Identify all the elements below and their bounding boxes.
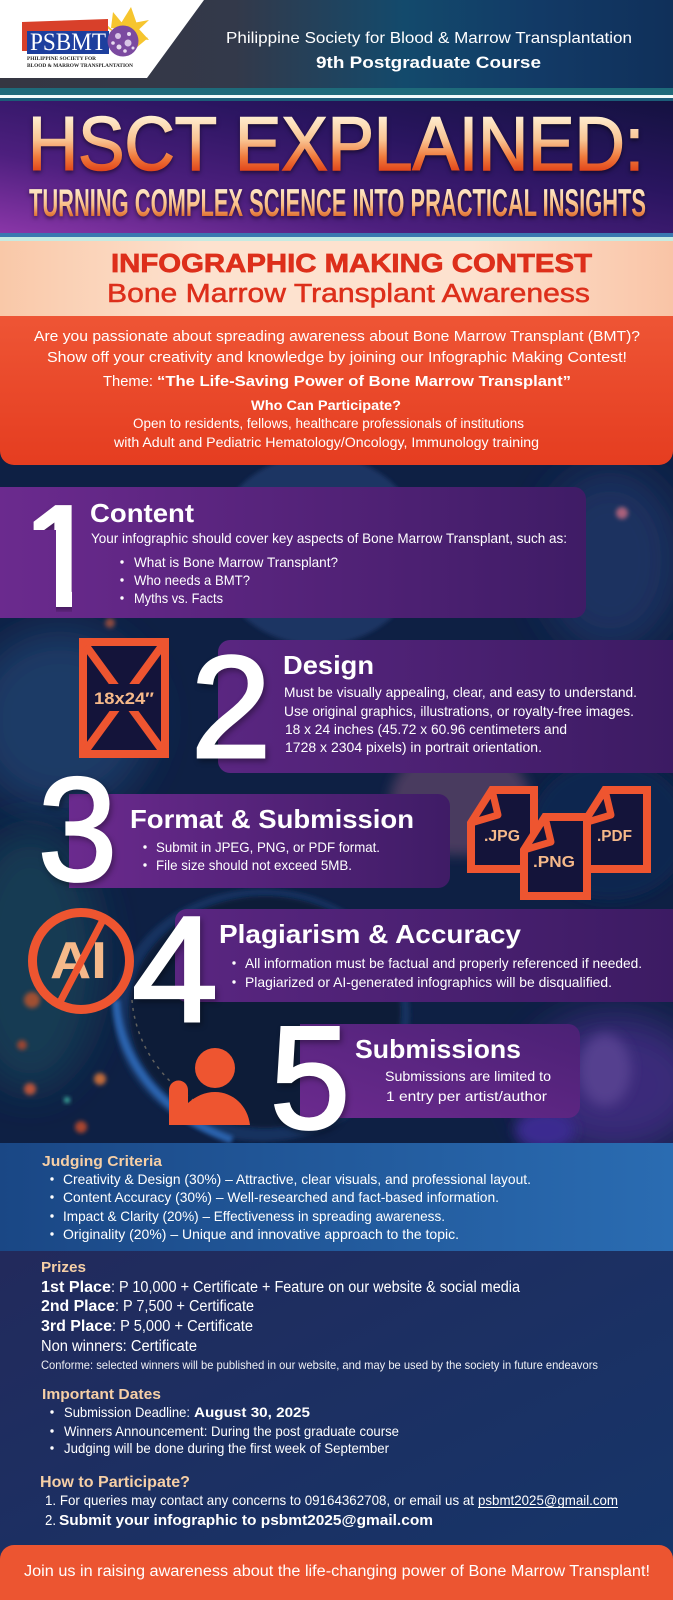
icon: sun rays bbox=[104, 7, 149, 48]
icon: JPG file bbox=[471, 790, 534, 869]
bullet list: Plagiarized or AI-generated infographics will be disqualified. bbox=[245, 974, 612, 990]
body text: 1 entry per artist/author bbox=[386, 1088, 547, 1104]
intro panel: Are you passionate about spreading awareness about Bone Marrow Transplant (BMT)? bbox=[34, 328, 640, 345]
third place: 3rd Place bbox=[41, 1318, 112, 1335]
bullet list: Myths vs. Facts bbox=[134, 590, 223, 606]
third place: : P 5,000 + Certificate bbox=[112, 1318, 253, 1335]
header text: society and course bbox=[226, 30, 632, 72]
logo subtitle: PHILIPPINE SOCIETY FOR bbox=[27, 56, 96, 62]
first place: : P 10,000 + Certificate + Feature on our website & social media bbox=[111, 1279, 520, 1296]
heading: Plagiarism & Accuracy bbox=[219, 919, 522, 949]
who can participate: with Adult and Pediatric Hematology/Oncology, Immunology training bbox=[113, 435, 539, 450]
bullet list bbox=[143, 839, 380, 873]
number 2: 2 bbox=[191, 626, 271, 788]
heading: Design bbox=[283, 650, 374, 680]
number 5: 5 bbox=[270, 996, 350, 1159]
panel 3: format and submission bbox=[38, 748, 450, 912]
bullet list: Who needs a BMT? bbox=[134, 572, 250, 588]
how to participate section: psbmt2025@gmail.com bbox=[478, 1492, 618, 1508]
contest heading panel bbox=[0, 237, 673, 316]
top header band bbox=[0, 0, 673, 101]
body text bbox=[385, 1068, 551, 1104]
panel 5: submissions bbox=[270, 996, 580, 1159]
logo name: PSBMT bbox=[30, 29, 106, 56]
panel 1: content: Your infographic should cover key aspects of Bone Marrow Transplant, such as: bbox=[91, 530, 567, 546]
icon: no AI: AI bbox=[50, 932, 107, 990]
bullet list: Submit in JPEG, PNG, or PDF format. bbox=[156, 839, 380, 855]
intro panel bbox=[0, 316, 673, 465]
theme: “The Life-Saving Power of Bone Marrow Transplant” bbox=[157, 373, 571, 390]
logo subtitle: BLOOD & MARROW TRANSPLANTATION bbox=[27, 63, 133, 69]
first place: 1st Place bbox=[41, 1279, 111, 1296]
number 1: 1 bbox=[25, 474, 95, 639]
how to participate section bbox=[40, 1474, 618, 1529]
bullet list bbox=[120, 554, 338, 606]
second place: 2nd Place bbox=[41, 1298, 115, 1315]
bullet list bbox=[232, 955, 642, 990]
criteria list: Originality (20%) – Unique and innovative approach to the topic. bbox=[63, 1226, 459, 1242]
third place bbox=[41, 1318, 253, 1335]
second place: : P 7,500 + Certificate bbox=[115, 1298, 254, 1315]
conforme note: Conforme: selected winners will be published in our website, and may be used by the society in future endeavors bbox=[41, 1358, 598, 1372]
logo subtitle bbox=[27, 56, 133, 69]
criteria list bbox=[50, 1171, 531, 1242]
non winners: Non winners: Certificate bbox=[41, 1338, 197, 1355]
bullet list: What is Bone Marrow Transplant? bbox=[134, 554, 338, 570]
prizes section bbox=[41, 1259, 598, 1372]
heading: Submissions bbox=[355, 1034, 521, 1064]
icon: purple marrow cell bbox=[108, 26, 138, 56]
body text: 18 x 24 inches (45.72 x 60.96 centimeters and bbox=[285, 721, 567, 737]
panel 1: content bbox=[0, 487, 586, 618]
logo panel bbox=[0, 0, 204, 78]
panel: lower information background bbox=[0, 1251, 673, 1600]
intro panel: Show off your creativity and knowledge by joining our Infographic Making Contest! bbox=[47, 349, 627, 366]
closing call-to-action banner: Join us in raising awareness about the life-changing power of Bone Marrow Transplant! bbox=[24, 1563, 650, 1580]
important dates section bbox=[42, 1386, 399, 1456]
criteria list: Content Accuracy (30%) – Well-researched and fact-based information. bbox=[63, 1189, 499, 1205]
who can participate: Who Can Participate? bbox=[251, 398, 401, 413]
body text: Use original graphics, illustrations, or royalty-free images. bbox=[284, 703, 634, 719]
panel: judging criteria bbox=[0, 1143, 673, 1251]
who can participate: Open to residents, fellows, healthcare professionals of institutions bbox=[133, 416, 524, 431]
body text: Submissions are limited to bbox=[385, 1068, 551, 1084]
important dates section: August 30, 2025 bbox=[194, 1404, 310, 1420]
heading: Content bbox=[90, 498, 194, 528]
bullet list: All information must be factual and properly referenced if needed. bbox=[245, 955, 642, 971]
important dates section: Judging will be done during the first week of September bbox=[64, 1440, 389, 1456]
criteria list: Impact & Clarity (20%) – Effectiveness in spreading awareness. bbox=[63, 1208, 445, 1224]
header text: society and course: Philippine Society for Blood & Marrow Transplantation bbox=[226, 30, 632, 47]
important dates section: Important Dates bbox=[42, 1386, 161, 1403]
criteria list: Creativity & Design (30%) – Attractive, clear visuals, and professional layout. bbox=[63, 1171, 531, 1187]
body text: 1728 x 2304 pixels) in portrait orientation. bbox=[285, 739, 542, 755]
contest heading panel: Bone Marrow Transplant Awareness bbox=[107, 280, 590, 308]
icon: person bbox=[169, 1048, 250, 1125]
number 3: 3 bbox=[38, 748, 117, 912]
logo blue box bbox=[27, 31, 109, 54]
background: cell imagery bbox=[0, 440, 673, 1155]
theme: Theme: bbox=[103, 373, 153, 390]
icon: PDF file: .PDF bbox=[597, 828, 632, 845]
icon: 18x24 poster: 18x24″ bbox=[94, 689, 154, 708]
header text: society and course: 9th Postgraduate Course bbox=[316, 54, 541, 72]
bullet list: File size should not exceed 5MB. bbox=[156, 857, 352, 873]
how to participate section: 1. For queries may contact any concerns to 09164362708, or email us at bbox=[45, 1492, 474, 1508]
second place bbox=[41, 1298, 254, 1315]
body text: Must be visually appealing, clear, and easy to understand. bbox=[284, 684, 637, 700]
heading: Format & Submission bbox=[130, 804, 414, 834]
closing call-to-action banner bbox=[0, 1545, 673, 1600]
panel 4: plagiarism and accuracy bbox=[132, 885, 673, 1053]
how to participate section: Submit your infographic to psbmt2025@gmail.com bbox=[59, 1512, 433, 1529]
icon: PDF file bbox=[584, 790, 647, 869]
prizes section: Prizes bbox=[41, 1259, 86, 1276]
contest heading panel: INFOGRAPHIC MAKING CONTEST bbox=[111, 248, 592, 278]
panel 2: design bbox=[191, 626, 673, 788]
who can participate bbox=[113, 398, 539, 450]
important dates section: Winners Announcement: During the post graduate course bbox=[64, 1423, 399, 1439]
how to participate section: How to Participate? bbox=[40, 1474, 190, 1491]
number 4: 4 bbox=[132, 885, 218, 1053]
how to participate section: 2. bbox=[45, 1512, 56, 1529]
icon: no AI bbox=[32, 912, 130, 1010]
important dates section: Submission Deadline: bbox=[64, 1404, 190, 1420]
icon: JPG file: .JPG bbox=[484, 828, 520, 845]
body text bbox=[284, 684, 637, 755]
logo red bar bbox=[22, 19, 108, 51]
icon: 18x24 poster bbox=[83, 642, 165, 754]
icon: PNG file bbox=[524, 817, 587, 896]
heading: Judging Criteria bbox=[42, 1153, 163, 1170]
icon: PNG file: .PNG bbox=[533, 854, 575, 871]
title banner bbox=[0, 101, 673, 237]
